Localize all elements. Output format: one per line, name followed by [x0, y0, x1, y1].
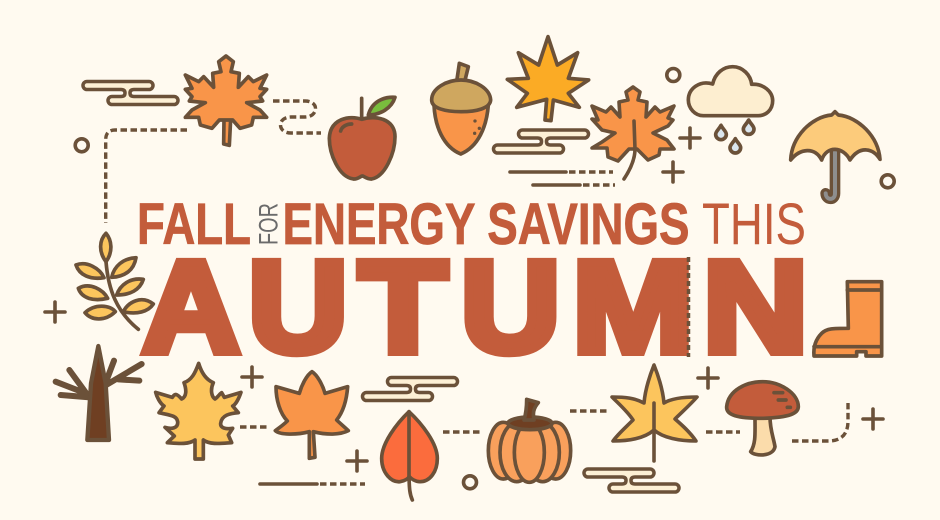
icon: orange leaf — [275, 372, 348, 458]
heading line: fall for energy savings this: THIS — [702, 192, 806, 257]
heading word: autumn: M — [573, 236, 693, 380]
cloud: top centre — [494, 130, 588, 153]
icon: yellow star maple leaf — [507, 37, 589, 121]
icon: orange maple leaf — [185, 56, 267, 145]
icon: acorn — [432, 63, 491, 154]
heading word: autumn — [142, 234, 808, 380]
heading line: fall for energy savings this: FOR — [254, 203, 284, 245]
icon: umbrella — [791, 112, 880, 199]
icon: maple leaf with curved vein — [592, 87, 674, 179]
icon: mushroom — [727, 382, 798, 455]
heading word: autumn: U — [248, 235, 348, 380]
cloud: bottom centre — [362, 378, 458, 400]
icon: leaf sprig — [76, 233, 153, 329]
icon: apple — [329, 97, 395, 179]
heading word: autumn: U — [461, 235, 560, 380]
heading line: fall for energy savings this: FALL — [137, 192, 251, 257]
cloud: top left — [83, 82, 178, 104]
title — [137, 192, 808, 380]
icon: pumpkin — [488, 399, 571, 482]
icon: red leaf — [382, 412, 437, 500]
heading word: autumn: T — [359, 234, 447, 379]
icon: rain cloud — [688, 67, 773, 153]
plus signs — [45, 128, 883, 471]
dashed divider in M — [687, 257, 690, 357]
heading word: autumn: N — [703, 236, 808, 380]
small circles — [75, 68, 894, 489]
heading word: autumn: A — [142, 234, 240, 379]
cloud: bottom right — [584, 469, 679, 492]
dashed connectors — [106, 101, 848, 484]
icon: rain boot — [814, 282, 882, 356]
heading line: fall for energy savings this: ENERGY SAVINGS — [282, 192, 690, 257]
icon: yellow star leaf — [612, 365, 697, 461]
icon: bare tree — [56, 346, 142, 440]
icon: yellow maple leaf — [156, 363, 241, 459]
